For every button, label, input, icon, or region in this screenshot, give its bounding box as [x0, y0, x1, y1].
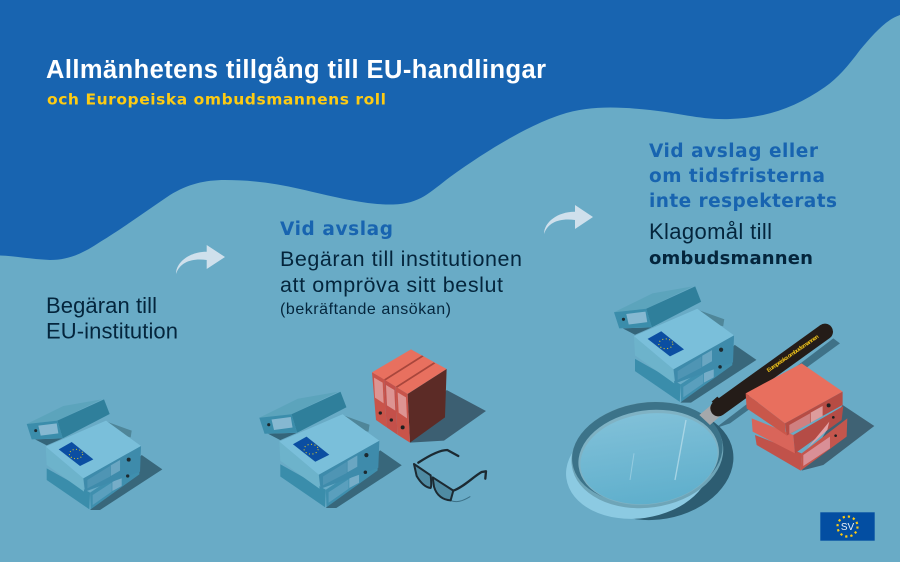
step 3 text: Klagomål till — [649, 219, 772, 244]
binders: blue stack step 2 — [259, 392, 402, 508]
EU flag with language code: SV — [841, 522, 854, 533]
magnifying glass — [559, 332, 840, 532]
handle shadow — [715, 338, 840, 428]
arrow: step 2 to step 3 — [544, 205, 593, 234]
step 3 text: inte respekterats — [649, 191, 837, 212]
binders: red stack — [746, 363, 874, 471]
step 2 text: att ompröva sitt beslut — [280, 273, 503, 297]
step 3 text: om tidsfristerna — [649, 166, 825, 187]
lens glass — [574, 404, 724, 513]
step 1 text: Begäran till — [46, 293, 157, 318]
handle — [718, 332, 825, 408]
step 1 text — [46, 293, 178, 344]
step 3 text: ombudsmannen — [649, 248, 813, 269]
step 2 text: Vid avslag — [280, 219, 393, 240]
glasses — [414, 450, 486, 502]
step 2 text: (bekräftande ansökan) — [280, 301, 451, 318]
EU flag with language code — [820, 512, 875, 541]
lens glints — [675, 420, 686, 480]
binders: blue stack step 3 — [614, 286, 756, 403]
subtitle: och Europeiska ombudsmannens roll — [47, 90, 386, 108]
ferrule — [699, 403, 723, 425]
step 2 text: Begäran till institutionen — [280, 247, 522, 271]
dark blue wave header — [0, 0, 900, 260]
lens rim — [564, 392, 730, 518]
step 3 text — [649, 141, 837, 269]
handle label: Europeiska ombudsmannen — [766, 334, 821, 374]
step 2 text — [280, 219, 522, 318]
lens light crescent — [559, 409, 717, 528]
step 3 text: Vid avslag eller — [649, 141, 819, 162]
lens shadow — [572, 396, 742, 532]
binders: blue stack step 1 — [27, 399, 162, 510]
arrow: step 1 to step 2 — [176, 245, 225, 274]
step 1 text: EU-institution — [46, 318, 178, 344]
binders: red upright set — [372, 349, 486, 443]
title: Allmänhetens tillgång till EU-handlingar — [46, 56, 546, 84]
